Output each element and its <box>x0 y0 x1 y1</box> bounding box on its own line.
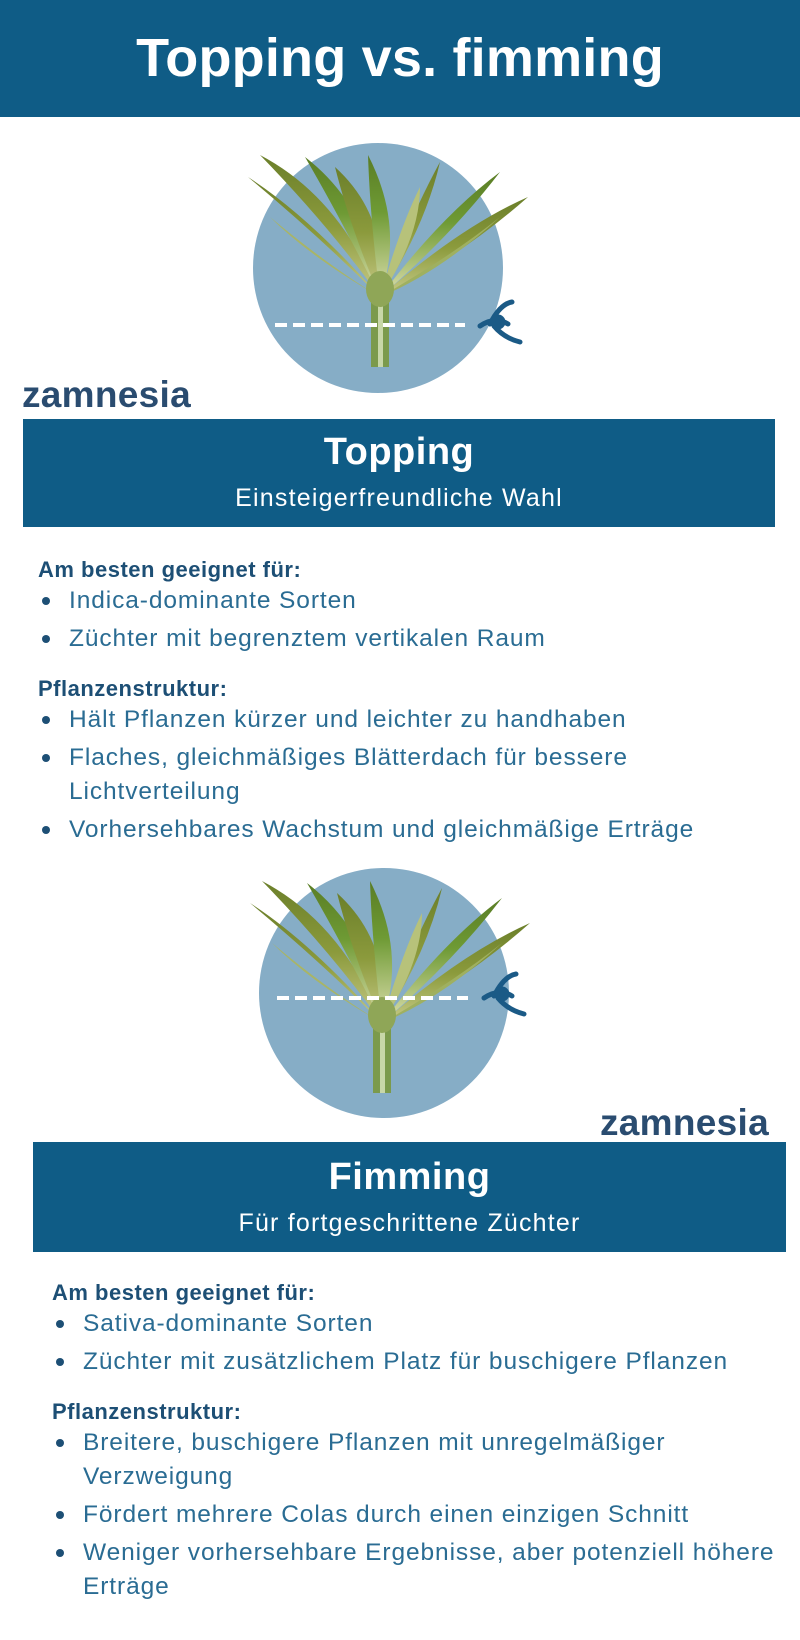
panel header: topping <box>23 419 775 527</box>
panel header: fimming <box>33 1142 786 1252</box>
plant <box>248 155 528 367</box>
text block: topping details: Hält Pflanzen kürzer und leichter zu handhaben <box>69 706 627 733</box>
title: Topping vs. fimming <box>136 28 664 88</box>
icon: scissors <box>484 974 524 1014</box>
text block: fimming details: Pflanzenstruktur: <box>52 1399 241 1424</box>
cut line <box>275 323 465 327</box>
title <box>0 0 800 117</box>
icon: scissors <box>480 302 520 342</box>
logo: zamnesia <box>600 1102 769 1143</box>
logo: zamnesia <box>22 374 191 415</box>
text block: topping details: Indica-dominante Sorten <box>69 587 357 614</box>
panel header: topping: Topping <box>324 431 474 473</box>
text block: fimming details: Sativa-dominante Sorten <box>83 1310 373 1337</box>
text block: topping details: Flaches, gleichmäßiges Blätterdach für bessere Lichtverteilung <box>69 744 628 805</box>
text block: topping details: Züchter mit begrenztem vertikalen Raum <box>69 625 546 652</box>
circle <box>259 868 509 1118</box>
text block: topping details: Am besten geeignet für: <box>38 557 301 582</box>
cut line <box>277 996 468 1000</box>
text block: fimming details <box>52 1280 774 1600</box>
illustration: fimming plant <box>250 868 530 1118</box>
circle <box>253 143 503 393</box>
illustration: topping plant <box>248 143 528 393</box>
text block: topping details: Pflanzenstruktur: <box>38 676 227 701</box>
text block: topping details <box>38 557 694 843</box>
text block: fimming details: Weniger vorhersehbare Ergebnisse, aber potenziell höhere Erträge <box>83 1539 774 1600</box>
text block: topping details: Vorhersehbares Wachstum und gleichmäßige Erträge <box>69 816 694 843</box>
text block: fimming details: Züchter mit zusätzlichem Platz für buschigere Pflanzen <box>83 1348 728 1375</box>
panel header: fimming: Für fortgeschrittene Züchter <box>238 1209 581 1237</box>
text block: fimming details: Am besten geeignet für: <box>52 1280 315 1305</box>
text block: fimming details: Fördert mehrere Colas durch einen einzigen Schnitt <box>83 1501 689 1528</box>
text block: fimming details: Breitere, buschigere Pflanzen mit unregelmäßiger Verzweigung <box>83 1429 665 1490</box>
panel header: fimming: Fimming <box>329 1156 490 1198</box>
plant <box>250 881 530 1093</box>
panel header: topping: Einsteigerfreundliche Wahl <box>235 484 563 512</box>
